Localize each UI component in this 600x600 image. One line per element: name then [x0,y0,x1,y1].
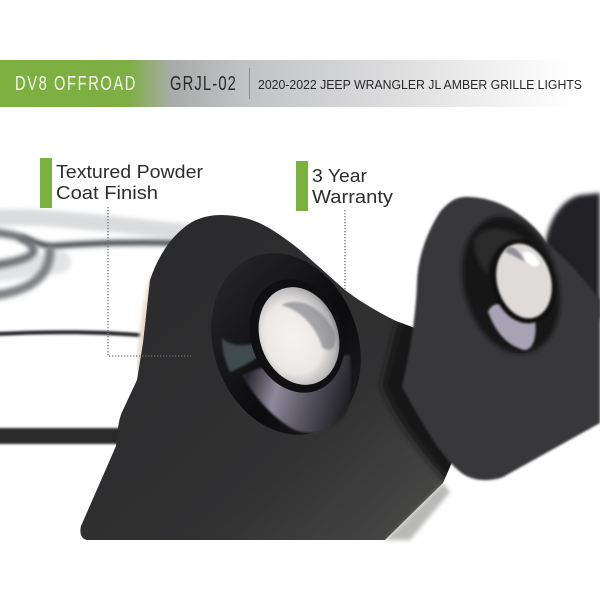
main bracket section [80,215,452,540]
dark shadow under second section [379,320,452,482]
product: grille light bracket [80,193,600,540]
part number: GRJL-02 [170,73,237,95]
band background [0,60,600,107]
main bezel outer [187,232,385,456]
second bracket section [402,197,600,480]
green marker [296,161,308,211]
header band [0,60,600,107]
main lens [245,276,353,396]
second bezel highlight [488,304,536,350]
callout text: Textured Powder [56,162,203,182]
second lens glint [520,249,542,269]
second lens [488,237,560,325]
second lens shade [505,247,525,262]
callout text: Coat Finish [56,183,158,203]
second bezel upper sheen [474,229,525,275]
callout: textured powder coat finish [40,158,208,356]
soft bottom edge [385,483,450,540]
main bezel reflection [222,338,262,372]
main bezel lilac highlight [242,355,351,433]
callout text: Warranty [312,187,393,207]
second bezel [447,205,575,365]
main lens ring [234,266,360,406]
brand name: DV8 OFFROAD [15,73,137,95]
divider [249,68,250,99]
callout text: 3 Year [312,166,367,186]
product title: 2020-2022 JEEP WRANGLER JL AMBER GRILLE LIGHTS [258,78,582,92]
blurred cable background [0,217,190,436]
green marker [40,158,52,208]
dotted leader [108,207,192,356]
callout: 3 year warranty [296,161,393,291]
third light housing [540,193,600,320]
dotted leader [344,210,346,291]
main lens glint [281,302,336,350]
second lens ring [482,233,564,331]
